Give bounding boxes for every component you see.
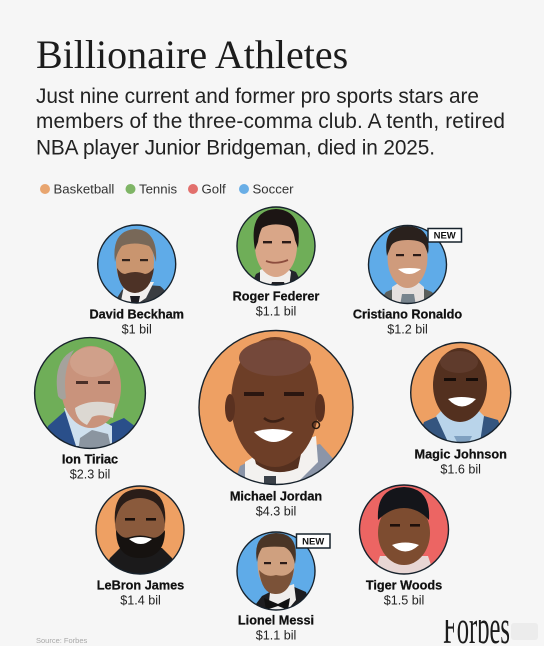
subtitle text block xyxy=(36,85,505,160)
athlete: Tiger Woods: Tiger Woods xyxy=(366,578,442,592)
athlete: Lionel Messi: Lionel Messi xyxy=(238,614,314,628)
athlete: Ion Tiriac xyxy=(35,338,145,482)
athlete: Tiger Woods: $1.5 bil xyxy=(384,594,424,608)
legend: Soccer xyxy=(252,182,294,196)
athlete: Magic Johnson: Magic Johnson xyxy=(415,448,507,462)
athlete: Ion Tiriac: $2.3 bil xyxy=(70,468,110,482)
athlete: Cristiano Ronaldo xyxy=(353,226,462,336)
athlete: Magic Johnson: $1.6 bil xyxy=(440,462,481,476)
athlete: LeBron James: LeBron James xyxy=(97,578,184,592)
athlete: Michael Jordan xyxy=(199,330,353,518)
athlete: David Beckham: David Beckham xyxy=(89,308,184,322)
athlete: Roger Federer: $1.1 bil xyxy=(256,304,296,318)
badge: new: NEW xyxy=(302,536,324,548)
athlete: Roger Federer xyxy=(233,207,319,318)
subtitle text block: Just nine current and former pro sports stars are xyxy=(36,85,479,108)
subtitle text block: members of the three-comma club. A tenth, retired xyxy=(36,110,505,133)
athlete: Cristiano Ronaldo: Cristiano Ronaldo xyxy=(353,308,462,322)
athlete: Roger Federer: Roger Federer xyxy=(233,290,319,304)
subtitle text block: NBA player Junior Bridgeman, died in 2025. xyxy=(36,136,435,160)
athlete: Magic Johnson xyxy=(411,342,511,476)
athlete: David Beckham xyxy=(89,225,184,336)
athlete: Lionel Messi: $1.1 bil xyxy=(256,628,296,642)
athlete: LeBron James xyxy=(96,486,184,608)
athlete: David Beckham: $1 bil xyxy=(122,322,152,336)
source note: Source: Forbes xyxy=(36,636,88,645)
athlete: Ion Tiriac: Ion Tiriac xyxy=(62,452,118,466)
title: Billionaire Athletes xyxy=(36,32,348,77)
legend: Golf xyxy=(202,182,226,196)
athlete: Michael Jordan: $4.3 bil xyxy=(256,504,296,518)
athlete: Tiger Woods xyxy=(360,485,448,608)
athlete: LeBron James: $1.4 bil xyxy=(120,594,161,608)
legend: Basketball xyxy=(54,182,114,196)
athlete: Michael Jordan: Michael Jordan xyxy=(230,490,322,504)
legend xyxy=(40,182,294,196)
legend: Tennis xyxy=(139,182,178,196)
athlete: Lionel Messi xyxy=(237,532,330,642)
athlete: Cristiano Ronaldo: $1.2 bil xyxy=(387,322,428,336)
badge: new: NEW xyxy=(434,231,456,242)
